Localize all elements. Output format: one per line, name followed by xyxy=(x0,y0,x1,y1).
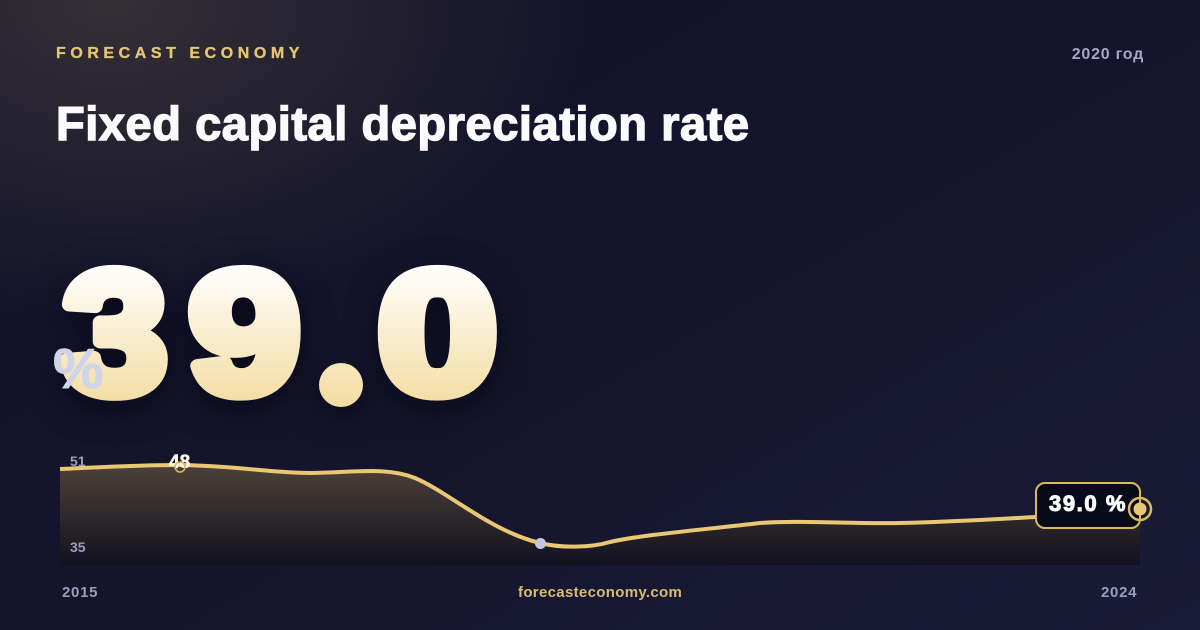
value callout xyxy=(1036,483,1140,528)
big value: 0 xyxy=(378,237,497,429)
big value: 9 xyxy=(189,237,300,429)
brand label: FORECAST ECONOMY xyxy=(56,45,304,62)
percent unit: % xyxy=(53,337,104,401)
value callout: 39.0 % xyxy=(1049,491,1127,516)
peak marker xyxy=(175,462,185,472)
chart line xyxy=(60,465,1140,547)
axis max label: 51 xyxy=(70,453,86,469)
end marker xyxy=(1129,498,1151,520)
year label: 2020 год xyxy=(1072,46,1144,63)
big value: . xyxy=(329,311,354,411)
start year: 2015 xyxy=(62,584,98,601)
big value: 3 xyxy=(63,237,167,429)
peak label: 48 xyxy=(169,452,190,473)
end year: 2024 xyxy=(1101,584,1137,601)
axis min label: 35 xyxy=(70,539,86,555)
chart area xyxy=(60,465,1140,565)
title: Fixed capital depreciation rate xyxy=(56,97,750,150)
low marker xyxy=(535,538,546,549)
site url: forecasteconomy.com xyxy=(518,584,682,601)
